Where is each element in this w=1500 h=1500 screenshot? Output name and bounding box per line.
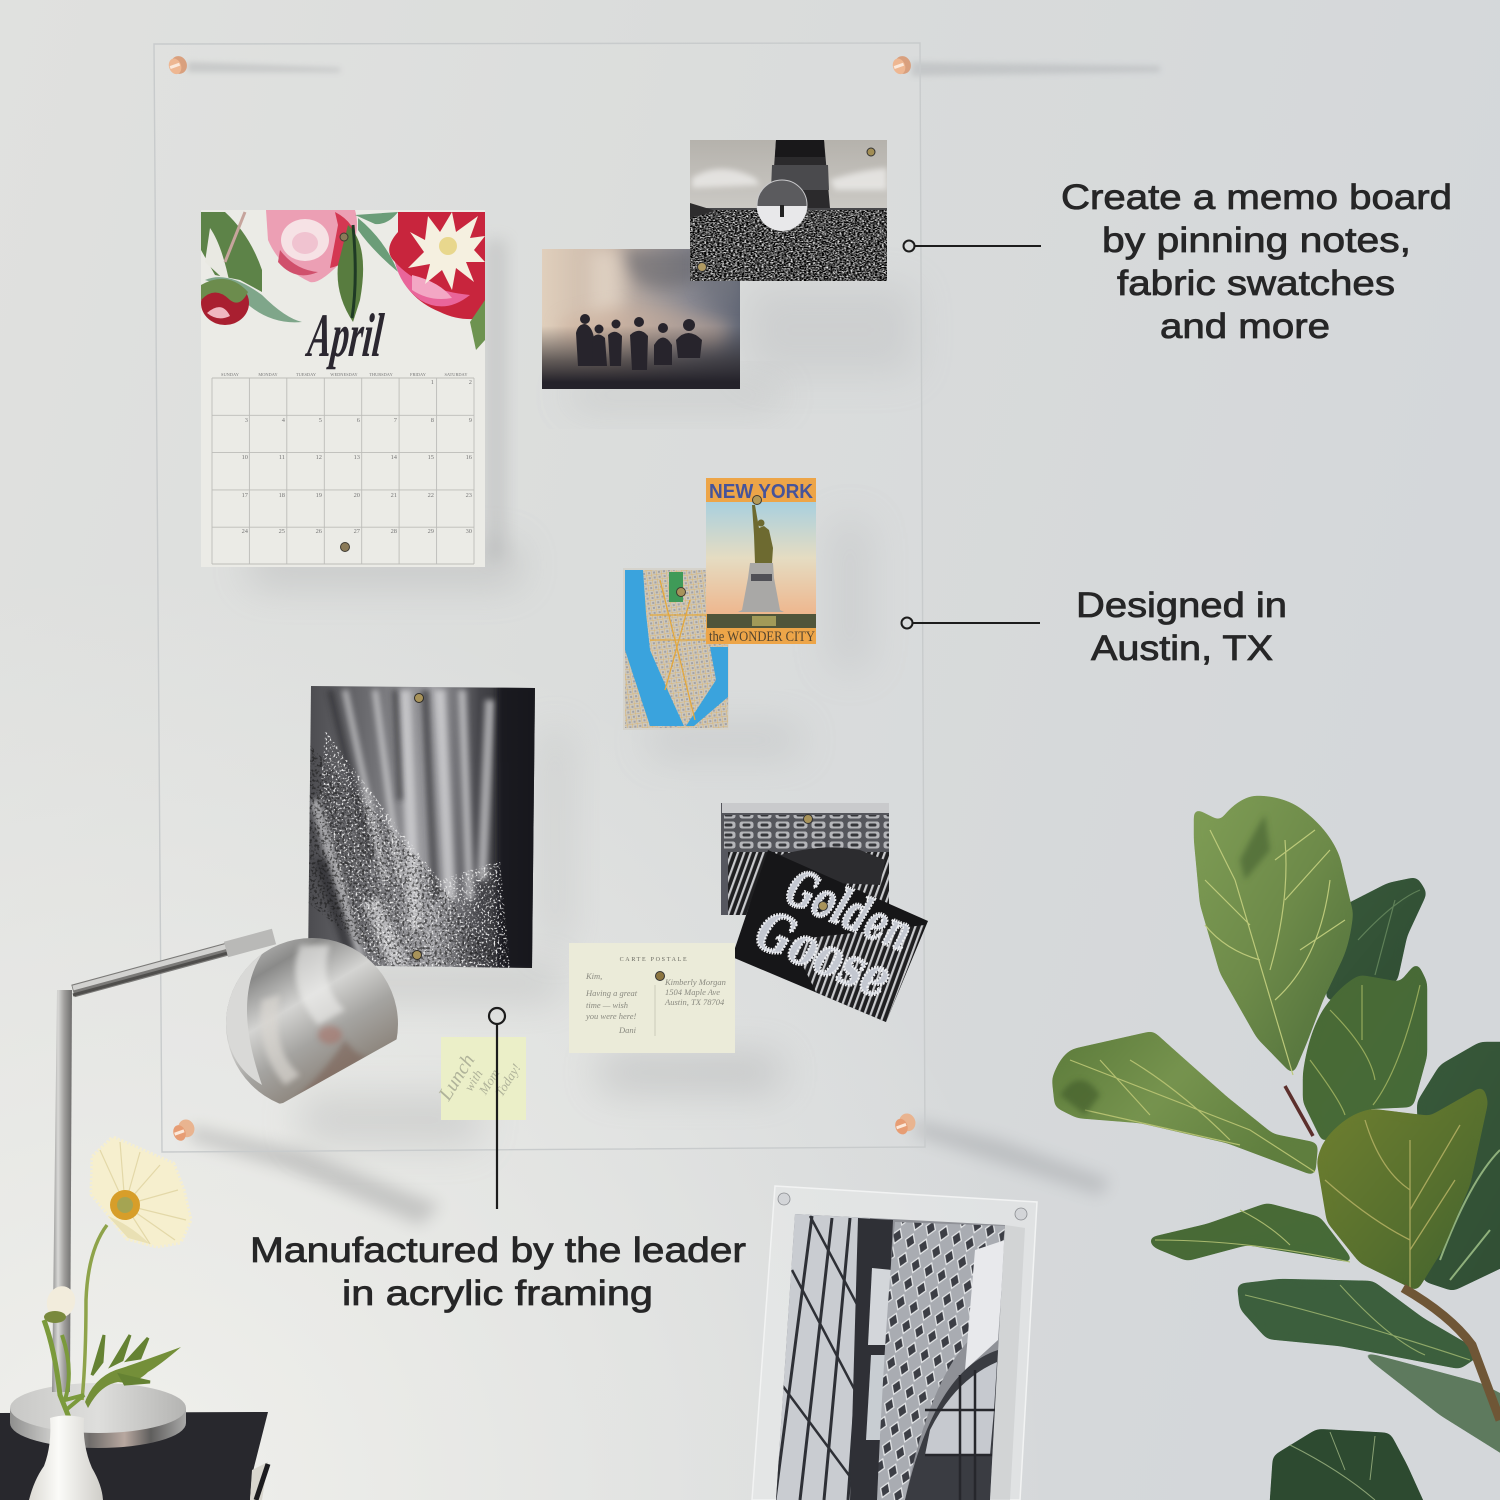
calendar dates: 20 bbox=[354, 492, 360, 499]
calendar dates: 26 bbox=[316, 528, 322, 535]
calendar dates bbox=[242, 379, 472, 535]
calendar dates: 18 bbox=[279, 492, 285, 499]
flower stem bbox=[82, 1225, 107, 1400]
calendar dates: 23 bbox=[466, 492, 472, 499]
handwritten postcard bbox=[569, 943, 735, 1053]
calendar month title: April bbox=[303, 302, 387, 370]
marker bbox=[489, 1008, 505, 1024]
books stack bbox=[0, 1412, 268, 1500]
back leaves bbox=[1266, 877, 1500, 1500]
people silhouettes bbox=[576, 314, 702, 370]
calendar pins bbox=[340, 233, 350, 552]
sticky handwriting: Mom bbox=[475, 1066, 502, 1098]
callout: memo board bbox=[904, 178, 1452, 346]
postcard address: 1504 Maple Ave bbox=[665, 987, 720, 997]
postcard address bbox=[664, 977, 726, 1007]
calendar dates: 14 bbox=[391, 454, 398, 461]
calendar weekday labels: TUESDAY bbox=[296, 372, 317, 377]
architecture photo bbox=[770, 1210, 1010, 1500]
calendar weekday labels: FRIDAY bbox=[410, 372, 427, 377]
calendar weekday labels: SUNDAY bbox=[221, 372, 240, 377]
acrylic board bbox=[154, 43, 925, 1152]
text: in acrylic framing bbox=[342, 1274, 653, 1313]
calendar dates: 16 bbox=[466, 454, 472, 461]
calendar dates: 19 bbox=[316, 492, 322, 499]
marquee lettering: Goose bbox=[747, 897, 901, 1011]
postcard heading: NEW YORK bbox=[709, 481, 814, 503]
petals bbox=[92, 1138, 190, 1246]
calendar dates: 11 bbox=[279, 454, 285, 461]
poppy flower bbox=[42, 1138, 190, 1420]
text bbox=[1061, 178, 1452, 346]
marker bbox=[902, 618, 912, 628]
calendar dates: 29 bbox=[428, 528, 434, 535]
calendar dates: 1 bbox=[431, 379, 434, 386]
postcard message: you were here! bbox=[585, 1011, 637, 1021]
sticky handwriting: Lunch bbox=[434, 1050, 479, 1105]
postcard title: CARTE POSTALE bbox=[620, 957, 688, 963]
stem bbox=[1403, 1288, 1500, 1420]
calendar weekday labels: SATURDAY bbox=[444, 372, 468, 377]
photo: crystal ball bbox=[690, 140, 887, 281]
marquee lettering: Golden bbox=[778, 857, 921, 963]
marker bbox=[904, 240, 914, 252]
lower long leaf bbox=[1237, 1279, 1483, 1369]
postcard address: Austin, TX 78704 bbox=[664, 997, 725, 1007]
photo: silhouettes in fog bbox=[542, 249, 740, 389]
postcard message: time — wish bbox=[586, 1000, 628, 1010]
sticky handwriting: Today! bbox=[492, 1061, 524, 1099]
callout: Austin bbox=[902, 586, 1287, 668]
big top leaf bbox=[1194, 796, 1353, 1075]
postcard address: Kimberly Morgan bbox=[664, 977, 726, 987]
calendar dates: 2 bbox=[469, 379, 472, 386]
text bbox=[250, 1231, 746, 1313]
calendar dates: 7 bbox=[394, 417, 398, 424]
text: Austin, TX bbox=[1091, 629, 1273, 668]
calendar watercolor flowers bbox=[201, 210, 485, 350]
calendar dates: 13 bbox=[354, 454, 360, 461]
postcard subheading: the WONDER CITY bbox=[709, 629, 815, 645]
calendar dates: 12 bbox=[316, 454, 322, 461]
front olive leaf bbox=[1317, 1086, 1488, 1291]
calendar dates: 4 bbox=[282, 417, 286, 424]
mid horizontal leaf bbox=[1148, 1203, 1355, 1263]
forest black and white photo bbox=[305, 684, 537, 970]
desk lamp bbox=[10, 934, 398, 1448]
text: by pinning notes, bbox=[1102, 221, 1411, 260]
statue of liberty bbox=[738, 505, 784, 612]
copper standoffs bbox=[166, 54, 918, 1143]
theatre ceiling photo bbox=[721, 803, 889, 915]
calendar bbox=[201, 210, 485, 567]
text bbox=[1076, 586, 1287, 668]
item shadows on the wall bbox=[250, 240, 915, 1145]
calendar grid bbox=[212, 378, 474, 564]
calendar dates: 6 bbox=[357, 417, 360, 424]
calendar dates: 21 bbox=[391, 492, 397, 499]
calendar dates: 8 bbox=[431, 417, 434, 424]
calendar dates: 10 bbox=[242, 454, 248, 461]
leaves texture bbox=[320, 730, 510, 968]
calendar dates: 27 bbox=[354, 528, 361, 535]
calendar dates: 17 bbox=[242, 492, 249, 499]
aluminium standoffs bbox=[778, 1193, 1027, 1220]
lamp shade bbox=[226, 938, 398, 1110]
lamp base bbox=[10, 1383, 186, 1448]
calendar dates: 15 bbox=[428, 454, 434, 461]
street map card bbox=[623, 568, 729, 730]
left long leaf bbox=[1052, 1031, 1318, 1176]
calendar weekday labels bbox=[221, 372, 468, 377]
sticky note bbox=[434, 1035, 526, 1127]
calendar dates: 24 bbox=[242, 528, 249, 535]
calendar weekday labels: WEDNESDAY bbox=[330, 372, 359, 377]
postcard message: Having a great bbox=[585, 988, 638, 998]
postcard message: Dani bbox=[618, 1025, 637, 1035]
twig bbox=[1285, 1086, 1313, 1136]
calendar weekday labels: MONDAY bbox=[258, 372, 279, 377]
leaves bbox=[85, 1347, 181, 1408]
calendar dates: 5 bbox=[319, 417, 322, 424]
sticky handwriting bbox=[434, 1035, 524, 1127]
fiddle leaf plant bbox=[1052, 796, 1500, 1500]
text: fabric swatches bbox=[1117, 264, 1395, 303]
text: Create a memo board bbox=[1061, 178, 1452, 217]
small acrylic frame with architecture photo bbox=[752, 1186, 1037, 1500]
postcard message bbox=[585, 971, 638, 1035]
calendar dates: 9 bbox=[469, 417, 472, 424]
text: Manufactured by the leader bbox=[250, 1231, 746, 1270]
marquee lettering bbox=[756, 870, 910, 996]
calendar dates: 22 bbox=[428, 492, 434, 499]
postcard message: Kim, bbox=[585, 971, 602, 981]
white vase bbox=[29, 1416, 103, 1500]
text: and more bbox=[1160, 307, 1330, 346]
New York postcard bbox=[706, 478, 816, 645]
calendar weekday labels: THURSDAY bbox=[369, 372, 394, 377]
text: Designed in bbox=[1076, 586, 1287, 625]
center leaf bbox=[1303, 962, 1427, 1143]
lamp arm bbox=[73, 934, 274, 995]
calendar dates: 30 bbox=[466, 528, 472, 535]
Golden Goose postcard bbox=[732, 850, 928, 1022]
sticky handwriting: with bbox=[461, 1067, 486, 1094]
callout: manufacturer bbox=[250, 1008, 746, 1313]
calendar dates: 3 bbox=[245, 417, 248, 424]
bud bbox=[42, 1282, 80, 1322]
calendar dates: 25 bbox=[279, 528, 285, 535]
calendar dates: 28 bbox=[391, 528, 397, 535]
lamp pole bbox=[52, 990, 72, 1392]
